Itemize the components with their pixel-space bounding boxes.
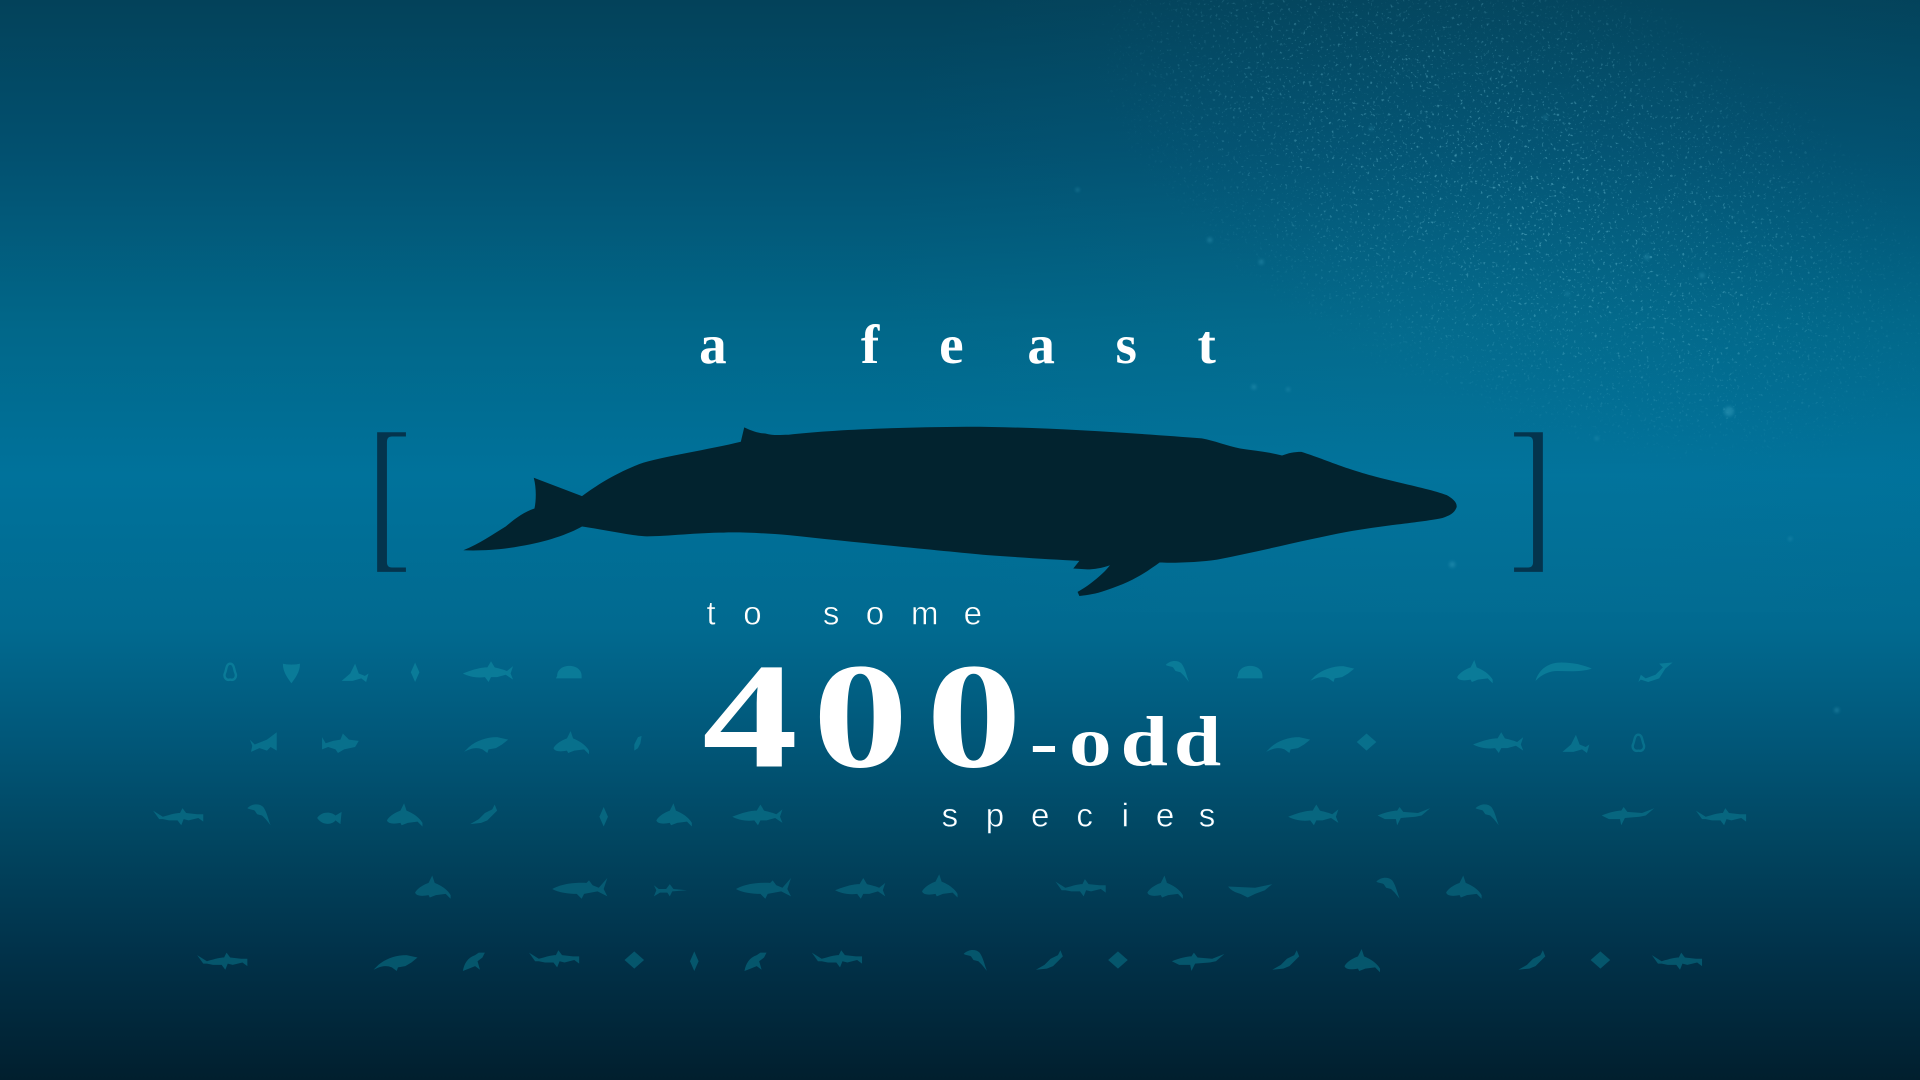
heading: a feast: a feast (699, 314, 1217, 375)
text: species: species (942, 798, 1215, 835)
left bracket (377, 432, 406, 572)
text: to some: to some (707, 595, 982, 632)
whale silhouette (463, 427, 1457, 596)
species row 3 (153, 803, 1746, 827)
number: 400: 400 (702, 634, 1022, 800)
text: -odd: -odd (1030, 702, 1221, 781)
species row 4 (415, 874, 1482, 899)
species row 2 (250, 731, 1644, 754)
species row 1 (225, 660, 1673, 683)
right bracket (1514, 432, 1543, 572)
marine species silhouettes (153, 660, 1746, 972)
species row 5 (197, 949, 1702, 972)
